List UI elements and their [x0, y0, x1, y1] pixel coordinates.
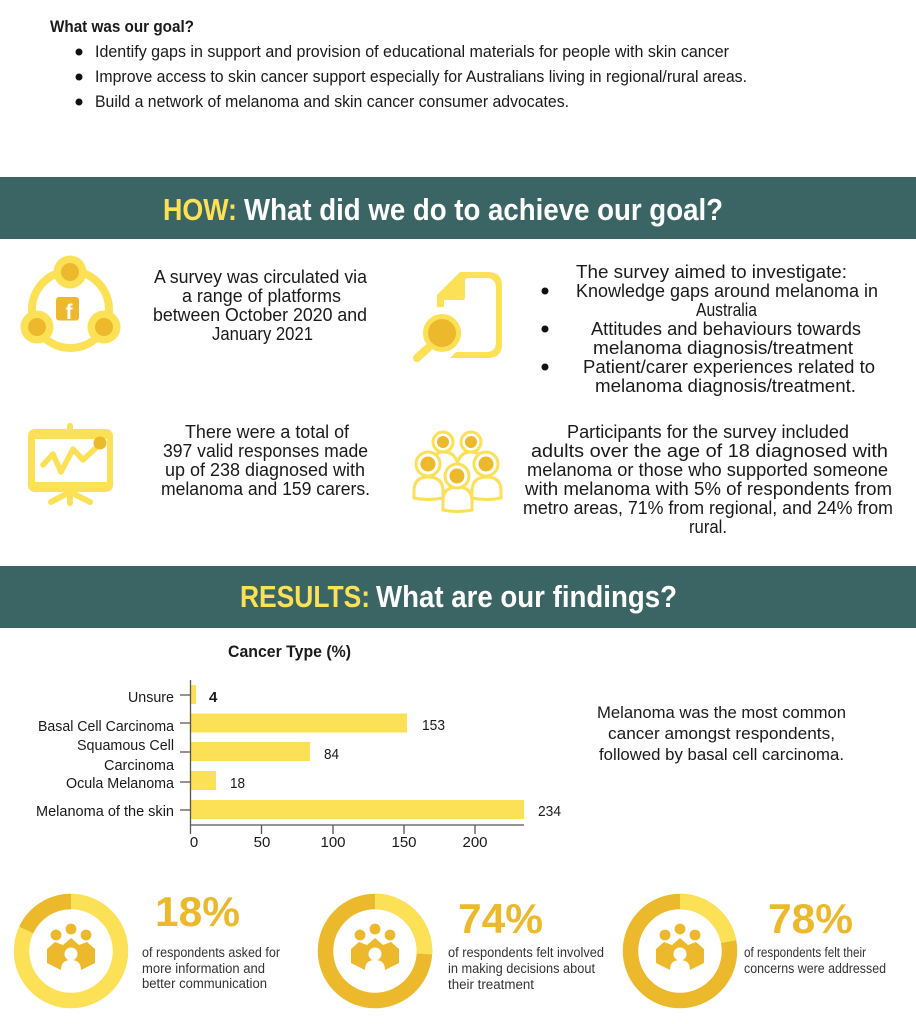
text: survey circulated: a range of platforms: [182, 285, 341, 306]
percent 74: 74%: [458, 895, 543, 942]
text: survey circulated: [153, 266, 368, 344]
donut chart 18%: [22, 902, 120, 1000]
caption 18: better communication: [142, 976, 267, 991]
caption 18: [142, 945, 280, 991]
goal bullet list: Identify gaps in support and provision of educational materials for people with skin cancer: [95, 43, 729, 61]
text: chart takeaway: followed by basal cell carcinoma.: [599, 746, 844, 764]
text: total responses: melanoma and 159 carers.: [161, 478, 370, 499]
text: survey aims: The survey aimed to investigate:: [576, 261, 847, 282]
value labels: 4: [209, 689, 218, 706]
text: participants: [523, 421, 893, 537]
text: participants: adults over the age of 18 diagnosed with: [531, 440, 888, 461]
text: survey circulated: A survey was circulated via: [154, 266, 368, 287]
text: survey aims: Attitudes and behaviours towards: [591, 318, 861, 339]
caption 74: in making decisions about: [448, 961, 595, 976]
text: survey aims: Knowledge gaps around melanoma in: [576, 280, 878, 301]
axis labels: 200: [462, 834, 488, 851]
text: survey circulated: between October 2020 and: [153, 304, 367, 325]
icon: people: [47, 923, 95, 970]
text: participants: Participants for the survey included: [567, 421, 849, 442]
category labels: Unsure: [128, 689, 174, 706]
text: total responses: There were a total of: [185, 421, 350, 442]
banner: how: [0, 177, 916, 239]
stat: 74 percent: [326, 895, 604, 1000]
text: participants: rural.: [689, 516, 727, 537]
banner: results: RESULTS:: [240, 579, 370, 614]
text: survey circulated: January 2021: [212, 323, 313, 344]
axis labels: 0: [190, 834, 198, 851]
goal bullet list: Build a network of melanoma and skin cancer consumer advocates.: [95, 93, 569, 111]
axes: [180, 680, 524, 834]
goal bullet list: Improve access to skin cancer support especially for Australians living in regional/rural areas.: [95, 68, 747, 86]
axis labels: 100: [320, 834, 346, 851]
text: total responses: up of 238 diagnosed with: [165, 459, 365, 480]
banner: results: [0, 566, 916, 628]
value labels: 18: [230, 775, 245, 792]
text: chart takeaway: Melanoma was the most common: [597, 704, 846, 722]
text: survey aims: Australia: [696, 299, 758, 320]
stat: 18 percent: [22, 888, 280, 1000]
category labels: Basal Cell Carcinoma: [38, 718, 175, 735]
percent 18: 18%: [155, 888, 240, 935]
text: survey aims: melanoma diagnosis/treatment.: [595, 375, 856, 396]
category labels: Melanoma of the skin: [36, 803, 174, 820]
text: survey aims: [542, 261, 878, 396]
goal heading: What was our goal?: [50, 18, 194, 36]
text: chart takeaway: cancer amongst respondents,: [608, 725, 835, 743]
caption 78: of respondents felt their: [744, 945, 866, 960]
text: survey aims: Patient/carer experiences related to: [583, 356, 875, 377]
banner: results: What are our findings?: [376, 579, 677, 614]
value labels: 84: [324, 746, 339, 763]
icon: social network facebook: [20, 256, 120, 348]
icon: group of people: [414, 432, 501, 512]
goal section: [50, 18, 747, 111]
axis labels: 50: [254, 834, 270, 851]
percent 78: 78%: [768, 895, 853, 942]
category labels: Squamous Cell: [77, 737, 174, 754]
icon: document and magnifier: [417, 272, 502, 358]
text: survey aims: melanoma diagnosis/treatment: [593, 337, 853, 358]
donut chart 74%: [326, 902, 424, 1000]
donut chart 78%: [630, 902, 730, 1000]
icon: social network facebook: f: [66, 301, 74, 324]
value labels: 153: [422, 717, 445, 734]
banner: how: What did we do to achieve our goal?: [244, 192, 723, 227]
goal bullet list: [76, 43, 747, 111]
caption 18: more information and: [142, 961, 265, 976]
caption 74: of respondents felt involved: [448, 945, 604, 960]
caption 78: [744, 945, 886, 976]
icon: people: [351, 923, 399, 970]
caption 78: concerns were addressed: [744, 961, 886, 976]
stat: 78 percent: [630, 895, 886, 1000]
category labels: [36, 689, 175, 820]
bars: [191, 685, 524, 819]
banner: how: HOW:: [163, 192, 237, 227]
text: total responses: 397 valid responses made: [163, 440, 368, 461]
caption 74: their treatment: [448, 977, 534, 992]
axis labels: 150: [391, 834, 417, 851]
caption 18: of respondents asked for: [142, 945, 280, 960]
text: participants: with melanoma with 5% of respondents from: [524, 478, 892, 499]
text: total responses: [161, 421, 370, 499]
text: participants: melanoma or those who supported someone: [527, 459, 888, 480]
icon: presentation chart: [28, 426, 113, 503]
value labels: [209, 689, 561, 820]
chart title: Cancer Type (%): [228, 643, 351, 661]
category labels: Carcinoma: [104, 757, 175, 774]
text: chart takeaway: [597, 704, 846, 764]
text: participants: metro areas, 71% from regional, and 24% from: [523, 497, 893, 518]
category labels: Ocula Melanoma: [66, 775, 175, 792]
value labels: 234: [538, 803, 561, 820]
caption 74: [448, 945, 604, 992]
bar chart: cancer type: [36, 643, 561, 851]
axis labels: [190, 834, 488, 851]
icon: people: [656, 923, 704, 970]
